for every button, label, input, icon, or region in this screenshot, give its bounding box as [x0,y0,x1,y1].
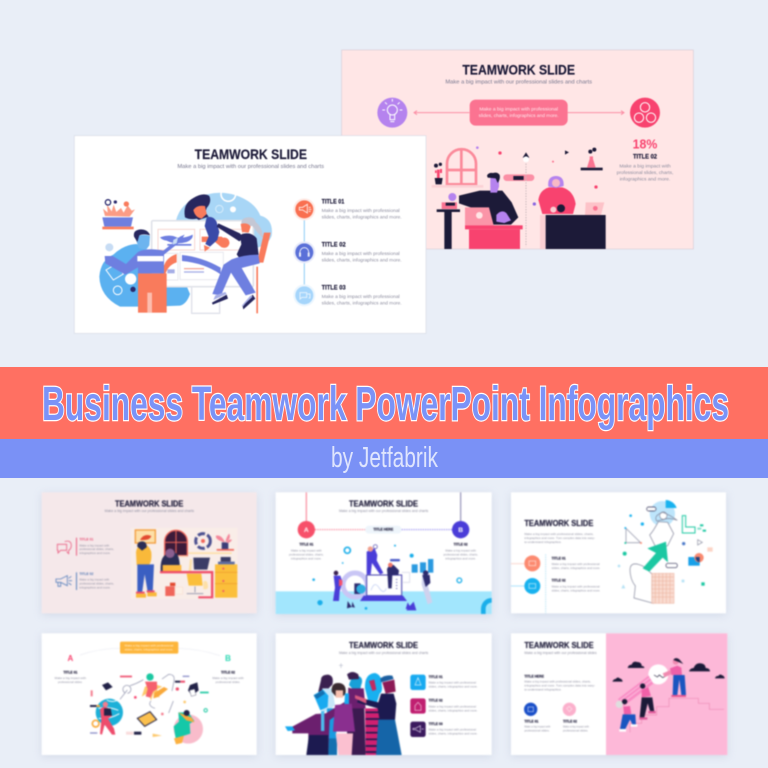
item: title 01 [511,555,600,571]
marker B: B [225,654,231,663]
item: title 02: TITLE 02 [429,699,443,703]
callout: slides, charts, infographics and more. [479,113,559,118]
item: title 02: TITLE 02 [454,543,468,547]
item: title 01: slides, charts, infographics and more. [552,566,600,570]
item: title 01: TITLE 01 [63,671,77,675]
item: title 02: professional slides. [216,680,240,684]
icon: team network [630,98,660,128]
marker B [452,492,469,538]
item: title 02: Make a big impact with [79,578,110,582]
panel: white teamwork slide [74,136,426,333]
item: title 01: Make a big impact with professional [429,681,476,685]
item: title 02: Make a big impact with professional [552,584,600,588]
item: title 02: Make a big impact with professional [322,251,400,256]
item: title 01: slides, charts, infographics and more. [429,685,478,689]
panel: thumbnail 1 office [42,492,257,613]
item: title 01: TITLE 01 [552,556,566,560]
item: title 02 [410,698,478,714]
item: title 03: TITLE 03 [322,285,346,291]
marker A: A [67,654,73,663]
item: title 01: Make a big impact with [79,543,110,547]
timeline [293,198,402,306]
panel: thumbnail 4 floating team [42,633,257,755]
item: title 02: Make a big impact with [445,548,476,552]
item: title 01: professional slides. [58,680,83,684]
item: title 02 [563,703,589,733]
item: title 03: slides, charts, infographics and more. [322,301,402,306]
item: title 01: Make a big impact with professional [552,562,600,566]
heading: TEAMWORK SLIDE [349,498,418,508]
item: title 02: Make a big impact with professional [429,704,476,708]
item: title 02: TITLE 02 [552,579,566,583]
description: to-understand infographics. [524,540,562,544]
marker B: B [458,527,463,534]
banner: main title [0,367,768,439]
item: title 02: professional slides. [563,729,588,733]
item: title 01: TITLE 01 [79,538,93,542]
description: infographics and more. Turn complex data into easy- [524,536,595,540]
description: Make a big impact with professional slides, charts, [524,532,594,536]
marker A: A [304,527,309,534]
subtitle: Make a big impact with our professional slides and charts [177,164,324,170]
subtitle: Make a big impact with our professional slides and charts [339,651,429,655]
item: title 01 [524,703,551,733]
item: title 01: slides, charts, infographics and more. [322,215,402,220]
item: title 01: TITLE 01 [524,720,538,724]
item: title 01 [289,543,324,560]
text block: title here: to-understand infographics. [524,688,562,692]
callout [120,642,178,654]
item: title 02: professional slides, charts, [443,552,478,556]
subtitle: Make a big impact with our professional slides and charts [339,509,429,513]
item: title 01 [410,675,478,690]
item: title 02: slides, charts, infographics and more. [552,588,600,592]
item: title 02: Make a big impact with [563,725,589,729]
item: title 01: TITLE 01 [322,199,345,205]
subtitle: Make a big impact with our professional slides [524,651,597,655]
illustration: office scene [432,146,606,249]
connectors [80,648,220,656]
dotted rail [544,554,547,613]
illustration: team around laptop [312,545,492,614]
illustration: team at whiteboard [99,187,272,313]
text block: title here: infographics and more. Turn complex data into easy- [524,684,595,688]
text block: title here: Make a big impact with professional slides, charts, [524,680,591,684]
item: title 03 [293,284,402,306]
item: title 01: professional slides. [524,729,550,733]
pill: title here: TITLE HERE [373,528,394,532]
heading: TEAMWORK SLIDE [524,518,594,528]
item: title 02: TITLE 02 [221,671,235,675]
item: title 02 [443,543,478,560]
item: title 01 [293,198,402,220]
callout [470,100,568,126]
text block: title here [524,674,595,692]
heading: TEAMWORK SLIDE [524,640,594,650]
description: Make a big impact with [619,163,671,168]
icon: light bulb [377,98,407,128]
illustration: office desk [131,528,238,599]
item: title 01: Make a big impact with professional [322,208,400,213]
item: title 02: TITLE 02 [79,572,93,576]
item: title 02: TITLE 02 [322,242,346,248]
heading: TEAMWORK SLIDE [462,61,575,77]
stat: 18%: 18% [633,136,657,151]
description: professional slides, charts, [617,170,673,175]
description [524,532,595,544]
panel: thumbnail 3 arrow [511,492,726,613]
item: title 03: Make a big impact with professional [429,728,476,732]
heading: TEAMWORK SLIDE [115,498,184,508]
subtitle: Make a big impact with our professional slides and charts [105,509,194,513]
illustration: arrow and figures [618,500,713,603]
item: title 02 [511,578,600,594]
item: title 02 [56,572,114,590]
item: title 02 [293,241,402,263]
marker A [298,492,315,538]
item: title 01: professional slides, charts, [289,552,324,556]
banner: author [0,439,768,478]
panel: pink teamwork slide [342,50,693,249]
arrow: right [568,111,624,115]
item: title 02: TITLE 02 [563,720,577,724]
callout: Make a big impact with professional [125,644,174,648]
connector left [315,528,365,531]
item: title 01: professional slides, charts, [79,547,114,551]
item: title 01: TITLE 01 [429,675,443,679]
illustration: group of colleagues [285,663,402,755]
item: title 03: slides, charts, infographics and more. [429,732,478,736]
item: title 01: infographics and more. [79,551,111,555]
item: title 02: slides, charts, infographics and more. [429,708,478,712]
ground band [276,591,492,614]
item: title 02: Make a big impact with [212,676,244,680]
heading: TEAMWORK SLIDE [349,640,418,650]
text block: title here: TITLE HERE [524,674,545,678]
connector right [402,528,452,531]
illustration: team climbing steps [612,658,725,732]
pill: title here [365,526,402,534]
subtitle: Make a big impact with our professional slides and charts [445,79,592,85]
item: title 02: infographics and more. [445,556,476,560]
panel: thumbnail 6 pink half [511,633,727,755]
illustration: floating people [90,673,209,744]
callout: slides, charts, infographics and more. [125,648,173,652]
banner: author: by Jetfabrik [331,442,438,474]
item: title 03 [410,722,478,737]
callout: Make a big impact with professional [479,106,558,111]
item: title 01: TITLE 01 [299,543,313,547]
description: infographics and more. [620,177,670,182]
panel: thumbnail 5 group [276,633,492,755]
arrow: left [414,111,469,115]
panel: thumbnail 2 A and B [276,492,492,614]
item: title 02: slides, charts, infographics and more. [322,258,402,263]
pink illustration area [606,633,727,755]
item: title 01: infographics and more. [291,556,322,560]
item: title 02: professional slides, charts, [79,581,114,585]
item: title 01: Make a big impact with [524,725,551,729]
description [617,163,673,182]
item: title 01: Make a big impact with [55,676,86,680]
label: title 02: TITLE 02 [633,154,658,160]
item: title 02 [212,671,244,684]
item: title 03: TITLE 03 [429,722,443,726]
item: title 03: Make a big impact with professional [322,294,400,299]
item: title 02: infographics and more. [79,585,111,589]
item: title 01 [55,671,86,684]
heading: TEAMWORK SLIDE [195,146,307,162]
item: title 01: Make a big impact with [291,548,322,552]
item: title 01 [57,538,114,556]
